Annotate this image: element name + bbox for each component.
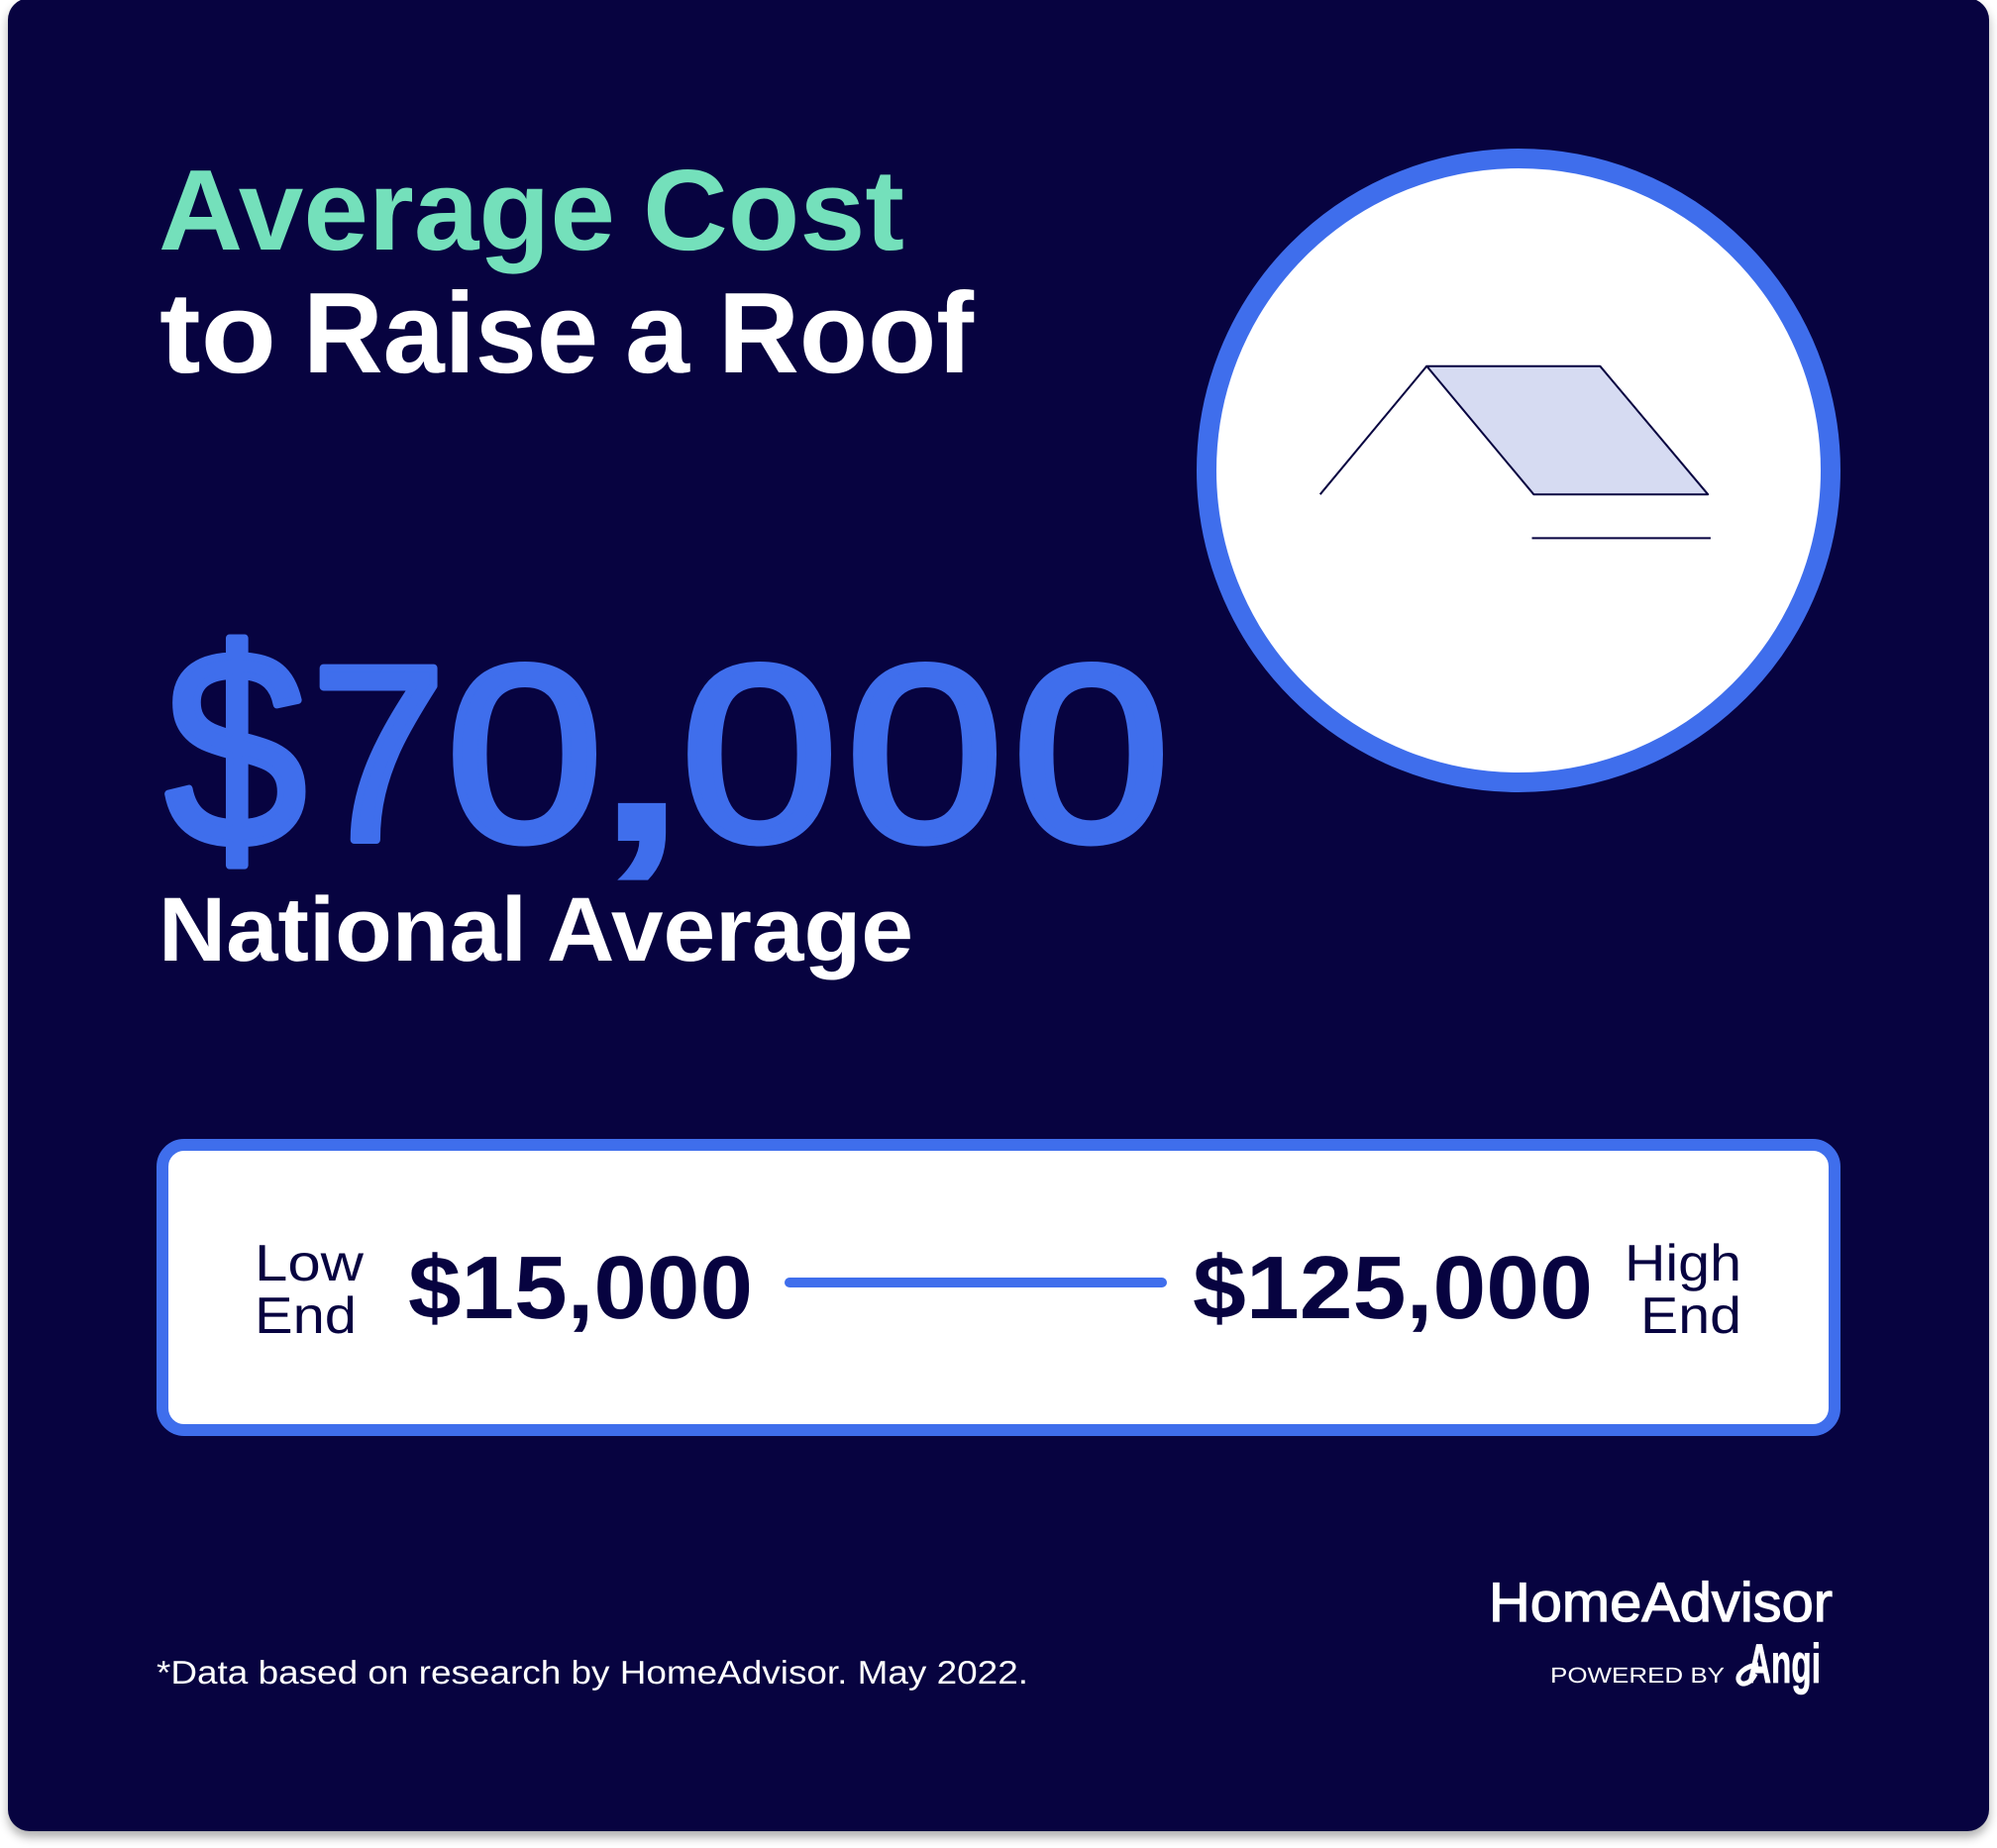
title line 2: to Raise a Roof: Roof (718, 268, 974, 397)
title line 2: to Raise a Roof: to (159, 268, 276, 397)
roof left slope (1320, 366, 1426, 494)
high end label: End (1640, 1287, 1741, 1345)
roof shaded plane (1426, 366, 1708, 494)
logo: HomeAdvisor powered by Angi (1489, 1571, 1833, 1694)
high price: $125,000 (1193, 1239, 1593, 1338)
low end label: End (255, 1287, 357, 1345)
range connector line (785, 1278, 1167, 1287)
panel: price range (162, 1145, 1835, 1430)
big number: $70,000 (165, 592, 1170, 905)
label: National Average (158, 879, 913, 980)
title line 2: to Raise a Roof (159, 268, 974, 397)
range box (162, 1145, 1835, 1430)
title line 1: Average Cost (158, 146, 904, 274)
big number: $70,000: , (594, 612, 688, 895)
label: National Average: Average (547, 879, 913, 980)
title line 2: to Raise a Roof: a (625, 268, 690, 397)
Angi wordmark: Angi (1747, 1632, 1821, 1694)
high end label: High (1625, 1235, 1741, 1292)
label: National Average: National (158, 879, 527, 980)
big number: $70,000: 0 (447, 615, 603, 893)
title (158, 146, 974, 397)
Angi swoosh (1738, 1665, 1758, 1684)
icon: roof in circle (1207, 158, 1831, 782)
title line 2: to Raise a Roof: Raise (303, 268, 598, 397)
footnote: *Data based on research by HomeAdvisor. May 2022. (157, 1654, 1028, 1691)
HomeAdvisor wordmark: HomeAdvisor (1489, 1571, 1833, 1633)
low end label: Low (255, 1235, 364, 1292)
powered by: POWERED BY (1550, 1663, 1725, 1688)
low price: $15,000 (408, 1239, 753, 1338)
big number: $70,000: 0 (1013, 615, 1170, 893)
big number: $70,000: 0 (682, 615, 838, 893)
big number: $70,000: 0 (847, 615, 1003, 893)
big number: $70,000: 7 (311, 615, 446, 893)
low end label (255, 1235, 364, 1345)
national average stat (158, 592, 1170, 980)
big number: $70,000: $ (165, 592, 306, 905)
circle badge (1207, 158, 1831, 782)
title line 1: Average Cost: Average (158, 146, 615, 274)
line under roof (1531, 537, 1711, 539)
high end label (1625, 1235, 1741, 1345)
title line 1: Average Cost: Cost (643, 146, 904, 274)
